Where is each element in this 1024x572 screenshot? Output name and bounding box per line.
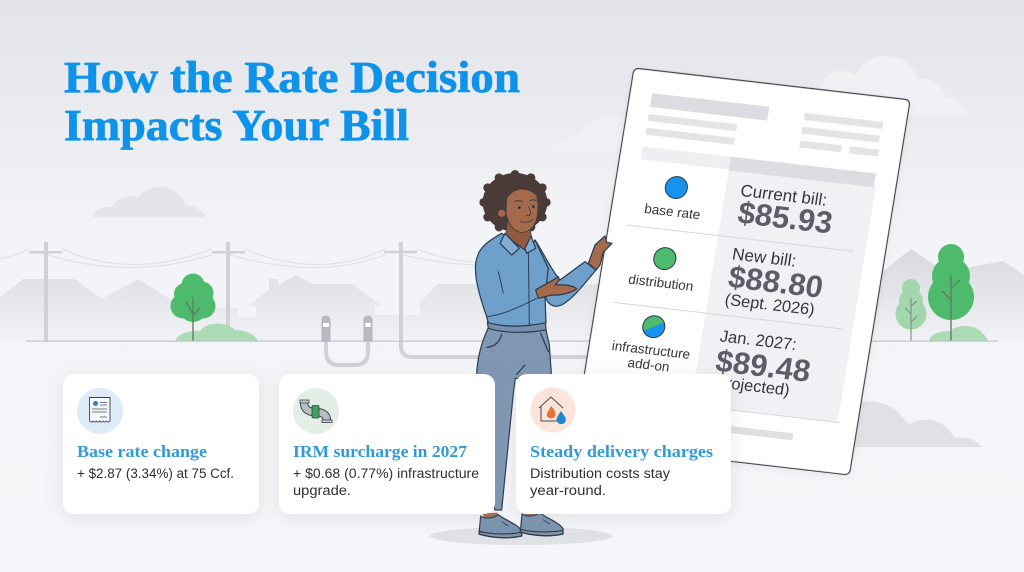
panel: utility bill document <box>573 68 910 475</box>
amount: current bill: Current bill: <box>739 181 828 210</box>
card: steady delivery charges <box>516 374 731 514</box>
collar <box>500 233 536 255</box>
body text <box>293 466 479 498</box>
person presenting the bill <box>475 170 612 510</box>
tree: right small <box>896 279 926 341</box>
belt <box>487 322 546 332</box>
bush: right <box>929 326 988 341</box>
icon: pipe <box>293 388 339 434</box>
title: Impacts Your Bill <box>64 101 409 150</box>
utility pole 1 <box>29 242 62 341</box>
neck <box>505 222 533 254</box>
body text: + $0.68 (0.77%) infrastructure <box>293 466 479 481</box>
pants <box>477 328 552 510</box>
table header <box>640 146 876 187</box>
shirt torso and left arm <box>475 233 548 326</box>
shirt details <box>487 252 537 324</box>
ground shadow <box>430 527 612 545</box>
heading: IRM surcharge in 2027 <box>293 442 468 461</box>
title: How the Rate Decision <box>64 53 520 102</box>
legend: distribution: distribution <box>627 272 695 294</box>
cloud: top right <box>813 56 968 115</box>
utility pole 3 with pipe <box>384 242 590 357</box>
hand: front palm <box>536 277 577 298</box>
body text: upgrade. <box>293 483 351 498</box>
tree: right large <box>928 244 974 341</box>
card: IRM surcharge <box>279 374 495 514</box>
amount: new bill: $88.80 <box>726 259 826 305</box>
left shoe <box>479 513 522 538</box>
ground line <box>26 340 998 342</box>
amount: new bill <box>724 244 828 320</box>
amount: January 2027: (projected) <box>710 373 791 400</box>
utility pole 2 <box>212 242 245 341</box>
icon: receipt <box>77 388 123 434</box>
houses: right neighbourhood <box>860 249 1024 341</box>
amount: new bill: New bill: <box>731 244 798 271</box>
bill header placeholder bars <box>645 93 884 161</box>
amount: January 2027: Jan. 2027: <box>719 327 798 354</box>
facial features <box>514 200 536 222</box>
legend: base rate <box>643 173 706 222</box>
gas meter pipes <box>322 316 372 365</box>
ear <box>498 209 506 217</box>
power lines <box>0 249 480 268</box>
card: base rate change <box>63 374 259 514</box>
heading: Steady delivery charges <box>530 442 713 461</box>
amount: January 2027: $89.48 <box>713 343 813 389</box>
table row rules <box>598 225 867 423</box>
title <box>64 53 520 150</box>
undershirt <box>519 251 527 265</box>
cloud: middle <box>553 117 640 150</box>
legend: infrastructure add-on <box>608 311 696 377</box>
amount: current bill: $85.93 <box>735 195 835 240</box>
right arm sleeve <box>535 240 596 306</box>
amount: January 2027 <box>710 327 816 402</box>
body text: Distribution costs stay <box>530 466 670 481</box>
legend: base rate: base rate <box>643 201 702 222</box>
amount: new bill: (Sept. 2026) <box>724 291 816 319</box>
legend: distribution <box>627 244 699 294</box>
body text <box>530 466 670 498</box>
right shoe <box>520 513 563 536</box>
hair <box>479 170 551 232</box>
body text: year-round. <box>530 483 606 498</box>
footer bar <box>677 420 793 440</box>
table right column <box>691 169 876 422</box>
body text: + $2.87 (3.34%) at 75 Ccf. <box>77 466 234 481</box>
icon: house with flame and water drop <box>530 388 576 432</box>
legend: infrastructure add-on: infrastructure <box>611 338 691 362</box>
shoes <box>479 513 563 538</box>
legend: infrastructure add-on: add-on <box>627 355 671 375</box>
bushes: left <box>175 324 258 341</box>
cloud: left <box>93 187 206 217</box>
cloud: bottom right <box>850 401 982 447</box>
pant details <box>487 333 548 374</box>
hand: on document <box>588 236 612 270</box>
heading: Base rate change <box>77 442 207 461</box>
tree: left <box>170 274 216 341</box>
face <box>506 189 538 232</box>
houses: left neighbourhood <box>0 275 600 341</box>
